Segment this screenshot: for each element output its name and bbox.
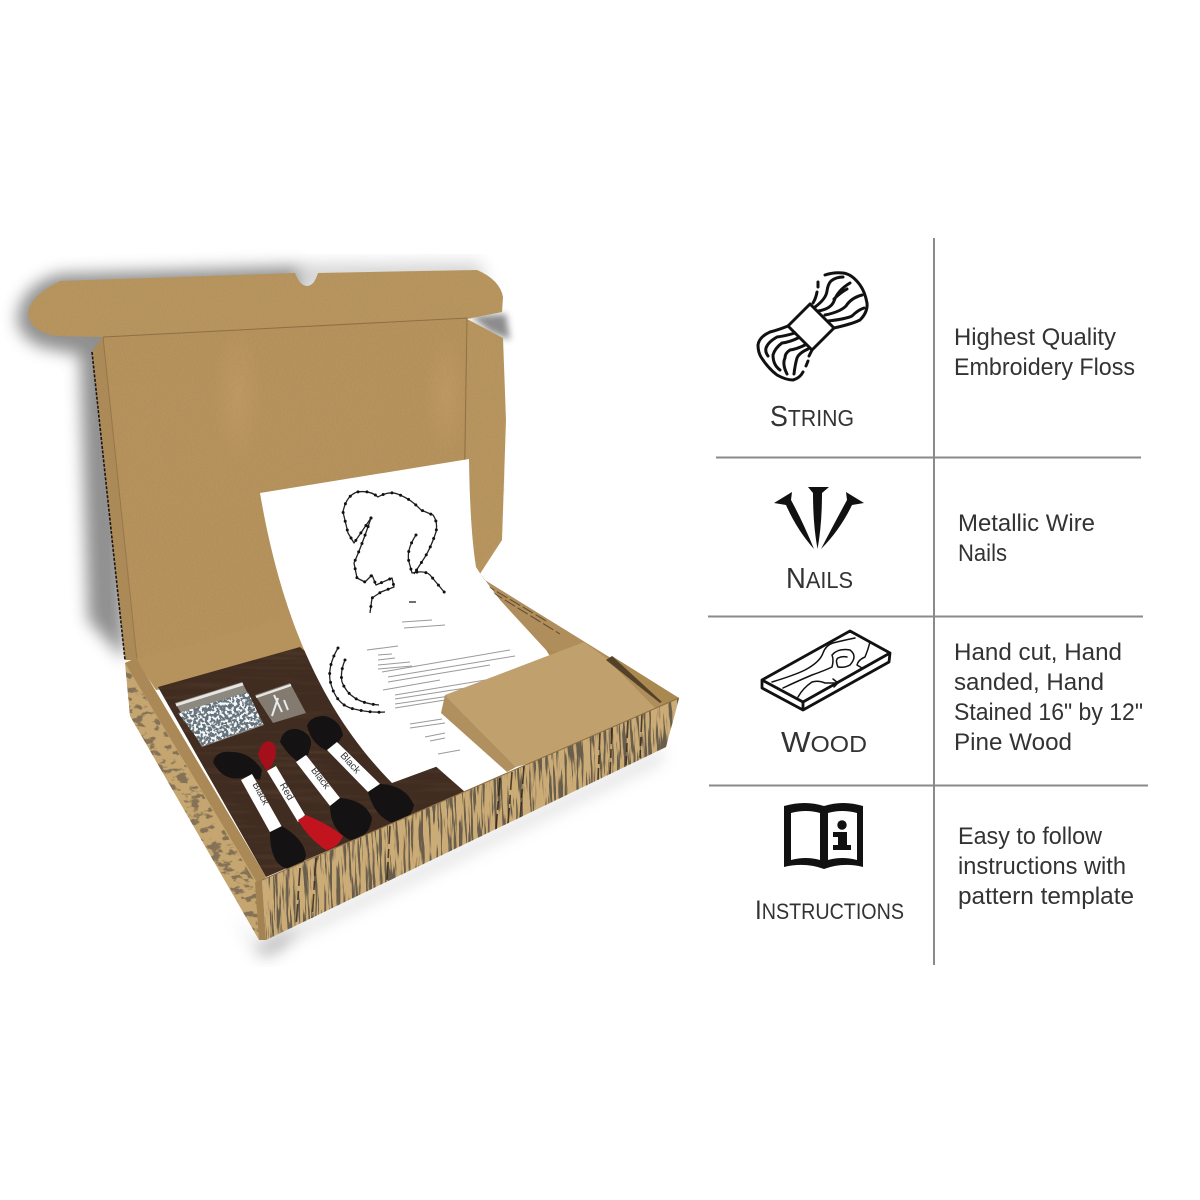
description: string: Embroidery Floss — [954, 354, 1135, 381]
open lid with tuck flap — [20, 265, 515, 665]
description: nails: Metallic Wire — [958, 510, 1095, 537]
label: wood: WOOD — [781, 727, 867, 759]
box left wall — [120, 658, 266, 945]
description: wood: Stained 16" by 12" — [954, 699, 1143, 726]
thread skein: black 1: Black — [250, 780, 271, 808]
label: string: STRING — [770, 401, 854, 433]
description: string: Highest Quality — [954, 324, 1116, 351]
description: instructions: pattern template — [958, 883, 1134, 910]
comparison table grid — [708, 238, 1148, 965]
icon: thread skein — [758, 273, 867, 380]
thread skein: black 2 — [280, 729, 372, 840]
instruction text lines — [367, 620, 515, 754]
description: instructions: Easy to follow — [958, 823, 1103, 850]
label: nails: NAILS — [786, 563, 853, 595]
back right wall of box — [476, 568, 679, 740]
row: instructions — [755, 803, 1134, 925]
thread skein: black 1 — [213, 752, 306, 869]
lower back panel of box — [136, 608, 330, 690]
label: instructions: INSTRUCTIONS — [755, 895, 904, 925]
instruction sheet with string pattern — [260, 459, 590, 792]
row: string — [758, 273, 1135, 433]
bag of nails — [172, 682, 268, 748]
description: nails: Nails — [958, 540, 1007, 567]
thread skein: black 3: Black — [338, 751, 363, 777]
description: wood: Hand cut, Hand — [954, 639, 1122, 666]
box shadow — [17, 262, 666, 958]
row: nails — [774, 487, 1095, 595]
description: wood: sanded, Hand — [954, 669, 1104, 696]
thread skein: black 3 — [307, 716, 414, 824]
bag of hangers — [255, 683, 306, 723]
icon: wood plank — [762, 631, 890, 710]
thread skein: black 2: Black — [308, 765, 332, 792]
thread skein: red — [258, 741, 343, 850]
small kraft box with wood — [441, 642, 679, 772]
box corner fold — [255, 880, 266, 940]
panel: product photo — [17, 262, 723, 958]
description: wood: Pine Wood — [954, 729, 1072, 756]
pattern: nail dots — [330, 492, 445, 712]
icon: open book with info symbol — [784, 803, 863, 869]
infographic — [8, 238, 1148, 965]
dark stained wood plank — [158, 647, 464, 877]
description: instructions: instructions with — [958, 853, 1126, 880]
box front wall with wood print — [262, 698, 680, 940]
thread skein: red: Red — [277, 781, 296, 802]
pattern: portrait silhouette — [330, 492, 445, 712]
row: wood — [762, 631, 1143, 759]
icon: three nails — [774, 487, 864, 549]
